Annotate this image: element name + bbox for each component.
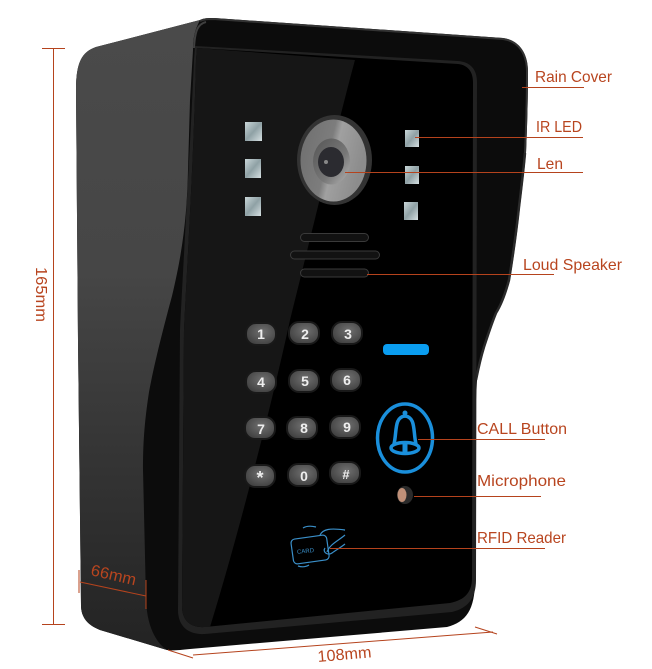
callout labels: Len — [537, 156, 563, 173]
keypad: 6 — [343, 372, 351, 388]
keypad: 8 — [300, 420, 308, 436]
door station device — [76, 18, 528, 650]
rain cover rim — [200, 19, 527, 153]
keypad: 5 — [301, 373, 309, 389]
height dimension — [32, 48, 65, 624]
call button bell icon — [378, 404, 432, 472]
camera lens — [297, 115, 372, 205]
keypad — [245, 322, 362, 488]
callout labels: Microphone — [477, 473, 566, 490]
width dimension — [168, 627, 497, 666]
depth dimension — [79, 562, 146, 609]
keypad: * — [256, 468, 264, 488]
keypad: 1 — [257, 326, 265, 342]
callout labels — [477, 69, 623, 547]
height dimension: 165mm — [32, 267, 49, 322]
keypad: 3 — [344, 326, 352, 342]
panel frame — [178, 46, 477, 634]
callout labels: CALL Button — [477, 421, 567, 438]
callout labels: IR LED — [536, 119, 582, 136]
IR LEDs — [245, 122, 419, 220]
keypad: 7 — [257, 421, 265, 437]
side face — [76, 20, 200, 650]
speaker slots — [290, 234, 380, 277]
RFID card icon — [291, 526, 345, 567]
front glass panel — [182, 48, 473, 627]
width dimension: 108mm — [317, 644, 372, 666]
keypad: 2 — [301, 326, 309, 342]
status light bar — [383, 344, 429, 355]
depth dimension: 66mm — [89, 562, 138, 589]
keypad: # — [342, 467, 350, 482]
RFID card icon: CARD — [297, 548, 315, 556]
keypad: 4 — [257, 374, 265, 390]
leader lines — [330, 88, 584, 548]
keypad: 0 — [300, 468, 308, 484]
dark body silhouette — [76, 18, 528, 650]
callout labels: Loud Speaker — [523, 257, 623, 274]
keypad: 9 — [343, 419, 351, 435]
panel reflection — [182, 48, 355, 627]
callout labels: Rain Cover — [535, 69, 613, 86]
callout labels: RFID Reader — [477, 530, 567, 547]
microphone — [397, 486, 413, 504]
